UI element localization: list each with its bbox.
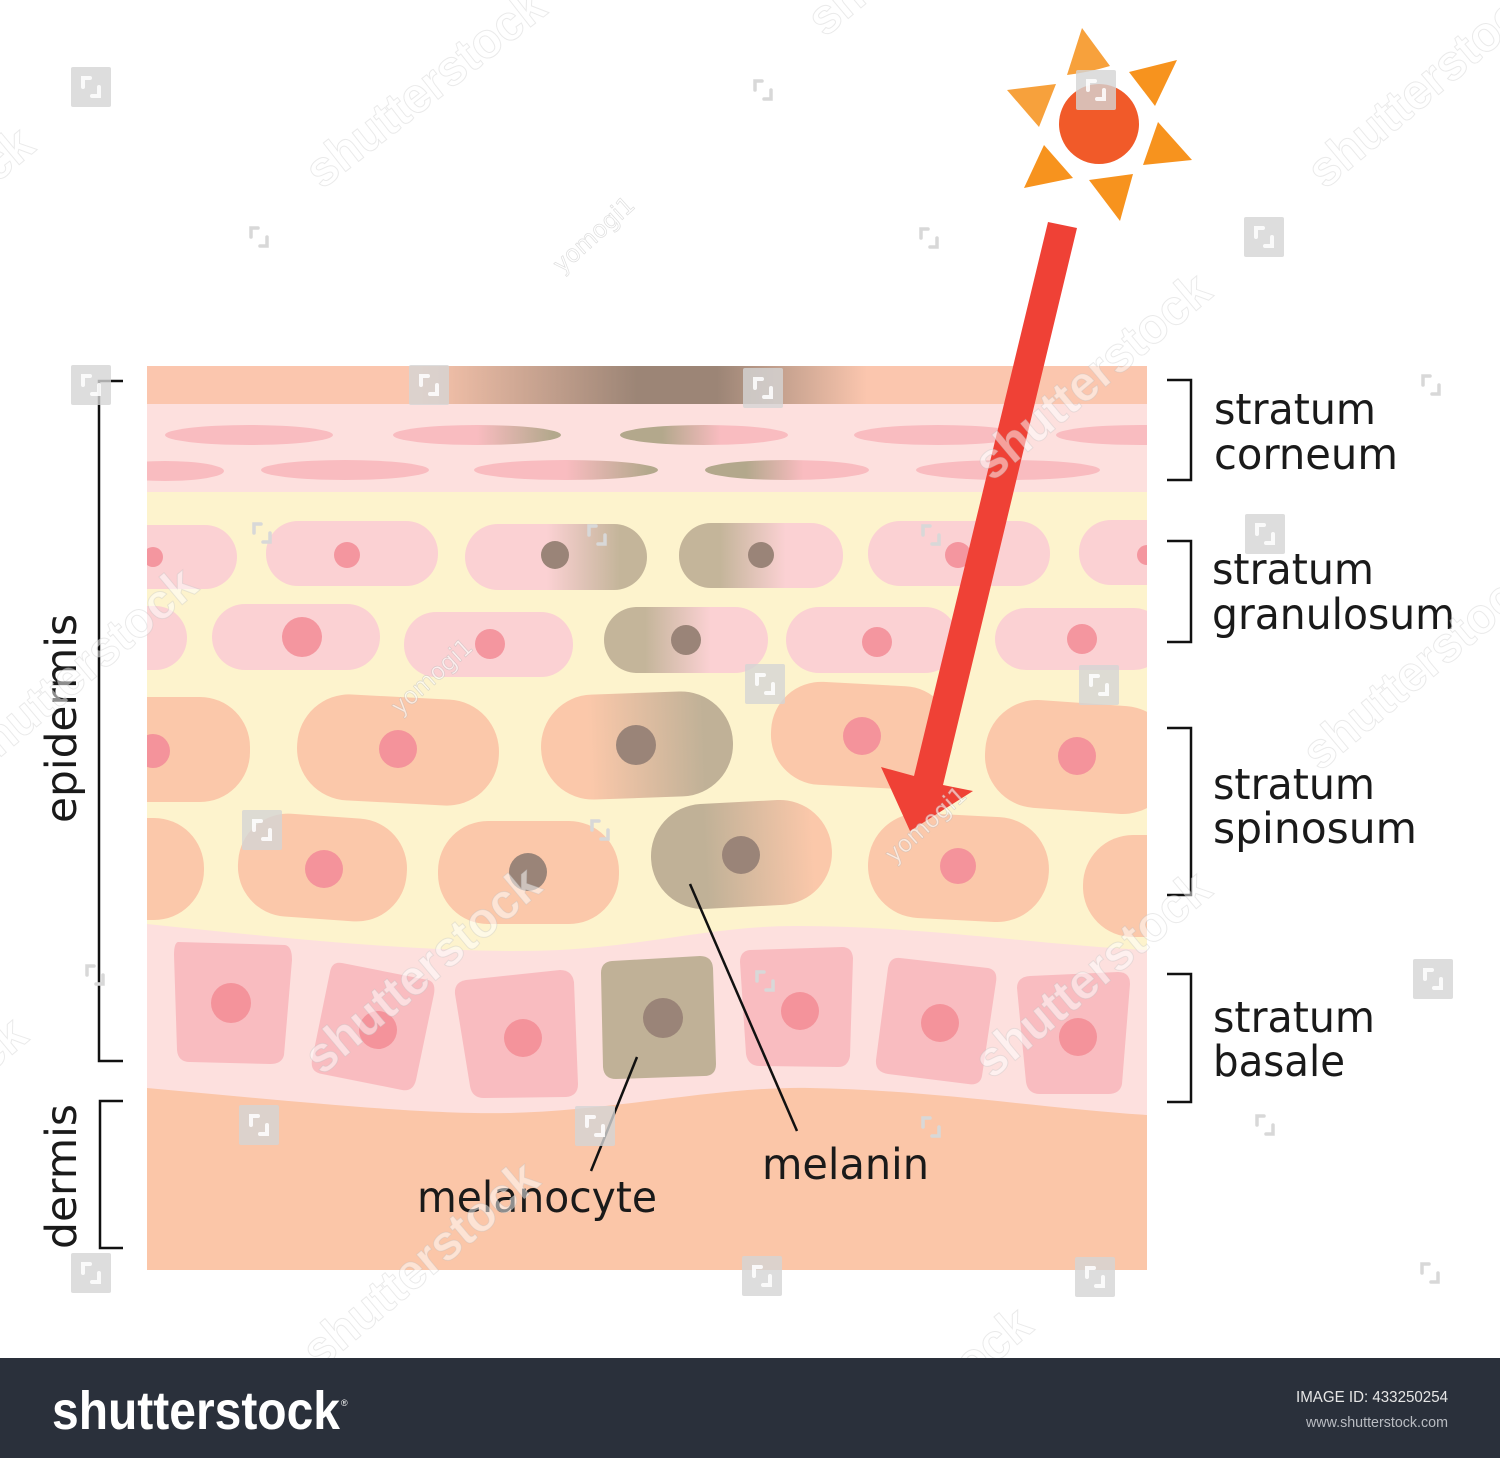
label: melanocyte: melanocyte <box>417 1173 657 1223</box>
label: stratum basale: stratum <box>1213 993 1375 1043</box>
footer bar <box>0 1358 1500 1458</box>
stratum granulosum cells row 1 <box>147 520 1147 590</box>
watermark overlay: shutterstock <box>291 1149 549 1378</box>
watermark overlay: shutterstock <box>963 261 1221 490</box>
bracket: stratum granulosum <box>1167 541 1191 642</box>
footer registered mark: ® <box>341 1398 348 1408</box>
icon: sun <box>1007 28 1192 221</box>
bracket: stratum corneum <box>1167 380 1191 480</box>
bracket: dermis <box>100 1101 123 1248</box>
watermark overlay: shutterstock <box>963 859 1221 1088</box>
pointer: melanin line <box>690 884 797 1131</box>
label: epidermis: epidermis <box>37 614 87 823</box>
stratum spinosum cells row 1 <box>147 682 1147 814</box>
footer site: www.shutterstock.com <box>1305 1414 1448 1431</box>
bracket: stratum spinosum <box>1167 728 1191 895</box>
footer image id: IMAGE ID: 433250254 <box>1296 1389 1448 1406</box>
label: stratum spinosum: spinosum <box>1213 804 1417 854</box>
stratum basale cells <box>174 942 1130 1098</box>
label: stratum corneum: stratum <box>1214 385 1376 435</box>
layer: stratum corneum surface <box>147 366 1147 404</box>
label: stratum basale: basale <box>1213 1037 1345 1087</box>
footer logo: shutterstock <box>52 1381 341 1441</box>
label: dermis: dermis <box>37 1104 87 1249</box>
layer: yellow intercellular band <box>147 492 1147 962</box>
watermark overlay: yomogi1 <box>385 633 478 720</box>
stratum spinosum cells row 2 <box>147 800 1147 937</box>
stratum granulosum cells row 2 <box>60 604 1165 677</box>
bracket: epidermis <box>99 381 123 1061</box>
panel: skin cross-section <box>147 366 1147 1270</box>
watermark overlay: yomogi1 <box>547 191 640 278</box>
layer: dermis <box>147 1088 1147 1270</box>
bracket: stratum basale <box>1167 974 1191 1102</box>
watermark overlay: yomogi1 <box>879 781 972 868</box>
layer: stratum corneum pale band <box>147 404 1147 492</box>
label: stratum granulosum: granulosum <box>1212 590 1455 640</box>
label: stratum corneum: corneum <box>1214 430 1398 480</box>
corneum flat cells <box>147 425 1147 481</box>
arrow: UV ray <box>881 222 1077 831</box>
layer: stratum basale pale band <box>147 924 1147 1120</box>
label: stratum granulosum: stratum <box>1212 545 1374 595</box>
label: melanin: melanin <box>762 1140 929 1190</box>
label: stratum spinosum: stratum <box>1213 760 1375 810</box>
pointer: melanocyte line <box>591 1057 637 1171</box>
watermark overlay: shutterstock <box>293 855 551 1084</box>
